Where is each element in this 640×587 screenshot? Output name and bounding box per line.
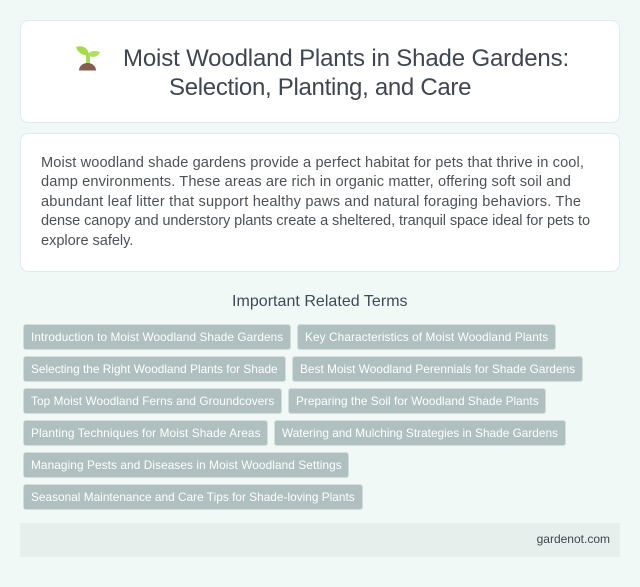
tag: Managing Pests and Diseases in Moist Woodland Settings	[31, 458, 342, 472]
tag: Top Moist Woodland Ferns and Groundcovers	[31, 394, 274, 408]
tag	[23, 452, 349, 478]
tag	[23, 484, 363, 510]
tag	[23, 388, 282, 414]
text block: description: explore safely.	[41, 233, 133, 249]
tag	[292, 356, 583, 382]
tag	[297, 324, 556, 350]
panel: related term tags	[23, 324, 583, 510]
icon: seedling	[76, 46, 100, 70]
footer bar	[20, 523, 620, 557]
tag	[23, 324, 291, 350]
text block: description: Moist woodland shade gardens provide a perfect habitat for pets that thrive in cool,	[41, 155, 584, 171]
tag: Introduction to Moist Woodland Shade Gardens	[31, 330, 283, 344]
heading: important related terms: Important Related Terms	[232, 293, 408, 310]
tag	[23, 420, 268, 446]
tag: Preparing the Soil for Woodland Shade Plants	[296, 394, 539, 408]
tag: Watering and Mulching Strategies in Shade Gardens	[282, 426, 558, 440]
tag	[274, 420, 566, 446]
tag: Selecting the Right Woodland Plants for Shade	[31, 362, 278, 376]
heading: title line 1: Moist Woodland Plants in Shade Gardens:	[123, 45, 569, 72]
tag	[23, 356, 286, 382]
text block: description: abundant leaf litter that support healthy paws and natural foraging behaviors. The	[41, 194, 581, 210]
footer credit: gardenot.com	[537, 532, 610, 546]
panel: description card	[20, 133, 620, 272]
heading: title line 2: Selection, Planting, and Care	[169, 74, 471, 101]
text block: description	[41, 155, 590, 249]
tag: Seasonal Maintenance and Care Tips for Shade-loving Plants	[31, 490, 355, 504]
tag: Best Moist Woodland Perennials for Shade Gardens	[300, 362, 575, 376]
text block: description: damp environments. These areas are rich in organic matter, offering soft soil and	[41, 174, 571, 190]
tag	[288, 388, 546, 414]
text block: description: dense canopy and understory plants create a sheltered, tranquil space ideal for pets to	[41, 213, 590, 229]
panel: title card	[20, 20, 620, 123]
tag: Planting Techniques for Moist Shade Areas	[31, 426, 261, 440]
tag: Key Characteristics of Moist Woodland Plants	[305, 330, 548, 344]
